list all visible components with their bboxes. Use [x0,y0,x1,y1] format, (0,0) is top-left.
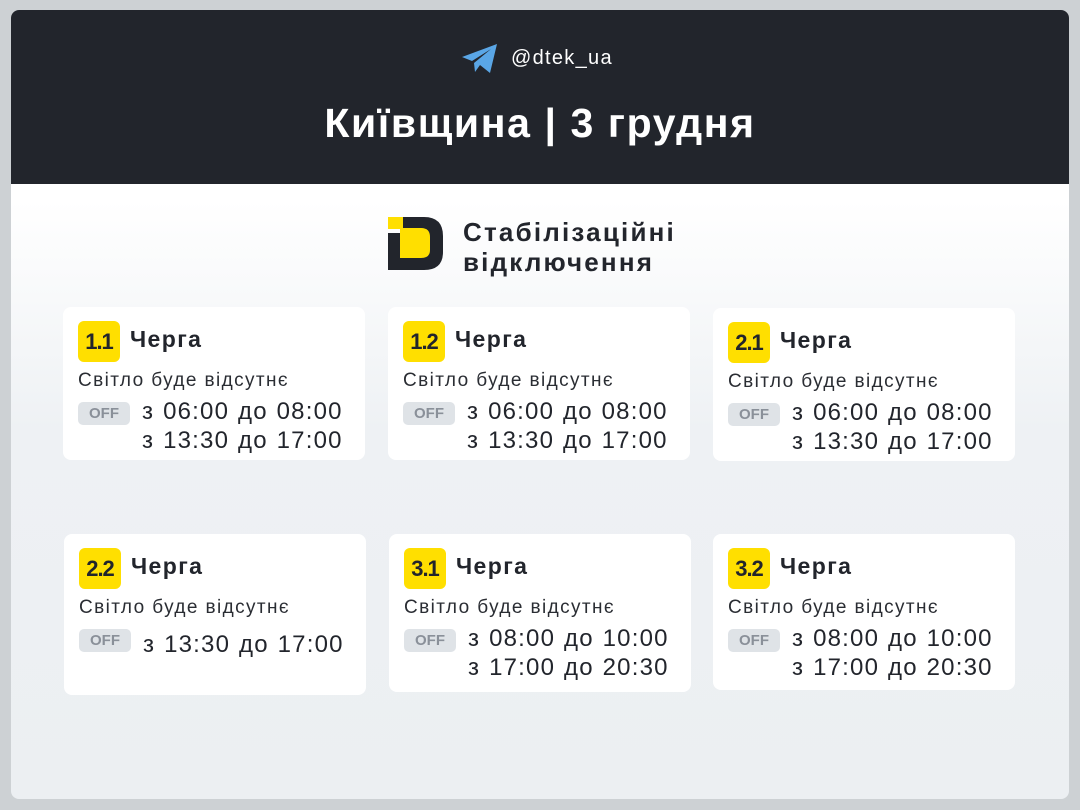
card 1.1: 1.1 [85,329,113,354]
telegram handle [462,44,613,73]
card 3.2 [713,534,1015,690]
title: Київщина | 3 грудня [324,100,756,146]
card 2.1: OFF [739,406,769,423]
card 2.2: 2.2 [86,556,114,581]
card 1.2: з 06:00 до 08:00 [467,398,668,425]
card 2.2: Черга [131,553,203,579]
card 3.1: з 08:00 до 10:00 [468,625,669,652]
logo block: відключення [463,247,654,277]
telegram handle: @dtek_ua [511,47,613,69]
icon: telegram [462,44,497,73]
logo block: Стабілізаційні [463,217,676,247]
card 2.1: 2.1 [735,330,763,355]
card 1.2: 1.2 [410,329,438,354]
card 3.1: з 17:00 до 20:30 [468,654,669,681]
card 2.2: Світло буде відсутнє [79,597,290,618]
card 3.2: Світло буде відсутнє [728,597,939,618]
card 2.2 [64,534,366,695]
card 1.2: з 13:30 до 17:00 [467,427,668,454]
header [11,10,1069,184]
card 1.1 [63,307,365,460]
card 2.1 [713,308,1015,461]
logo block [388,217,676,277]
card 1.2: Світло буде відсутнє [403,370,614,391]
card 1.1: OFF [89,405,119,422]
card 3.1: 3.1 [411,556,439,581]
card 3.2: з 08:00 до 10:00 [792,625,993,652]
card 1.1: з 13:30 до 17:00 [142,427,343,454]
card 1.1: Черга [130,326,202,352]
card 3.2: OFF [739,632,769,649]
card 1.1: з 06:00 до 08:00 [142,398,343,425]
card 2.2: OFF [90,632,120,649]
card 2.1: з 06:00 до 08:00 [792,399,993,426]
card 3.2: 3.2 [735,556,763,581]
card 2.1: з 13:30 до 17:00 [792,428,993,455]
icon: DTEK logo [388,217,443,270]
card 1.2: OFF [414,405,444,422]
card 1.2: Черга [455,326,527,352]
card 2.1: Черга [780,327,852,353]
card 3.2: Черга [780,553,852,579]
card 1.1: Світло буде відсутнє [78,370,289,391]
card 3.1: OFF [415,632,445,649]
card 1.2 [388,307,690,460]
card 3.1: Світло буде відсутнє [404,597,615,618]
card 3.1 [389,534,691,692]
card 3.2: з 17:00 до 20:30 [792,654,993,681]
card 3.1: Черга [456,553,528,579]
card 2.1: Світло буде відсутнє [728,371,939,392]
card 2.2: з 13:30 до 17:00 [143,631,344,658]
